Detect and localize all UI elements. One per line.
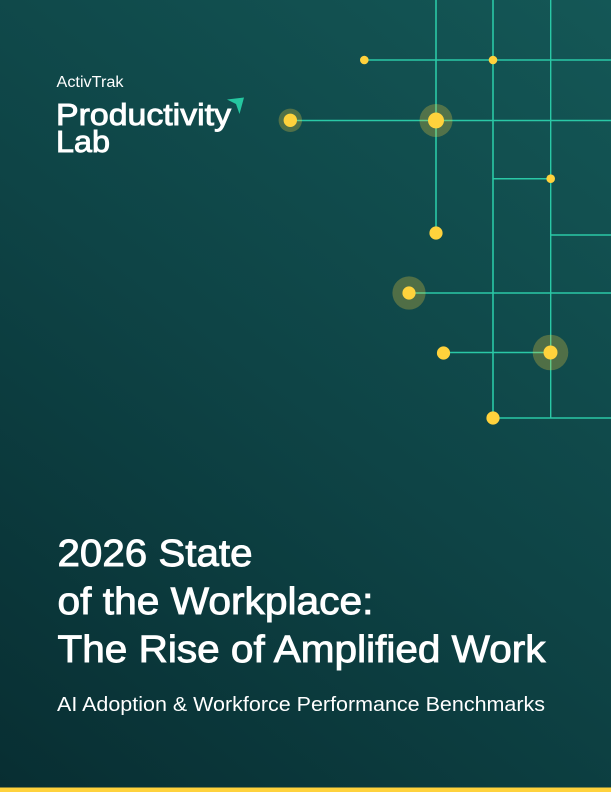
logo icon: teal arrow (227, 98, 244, 114)
node halos (279, 104, 568, 370)
logo: ActivTrak Productivity Lab (56, 74, 244, 159)
logo text: Lab: Lab (56, 125, 110, 159)
node dots (284, 56, 558, 425)
logo text: Productivity: Productivity (56, 98, 232, 132)
title (58, 533, 547, 671)
title: The Rise of Amplified Work (58, 629, 547, 671)
title: of the Workplace: (58, 581, 374, 623)
bottom accent bar (0, 788, 611, 792)
circuit lines (290, 0, 611, 418)
network graphic (279, 0, 611, 425)
logo text: ActivTrak: ActivTrak (56, 74, 124, 91)
title: 2026 State (58, 533, 252, 575)
subtitle: AI Adoption & Workforce Performance Benchmarks (57, 694, 545, 716)
